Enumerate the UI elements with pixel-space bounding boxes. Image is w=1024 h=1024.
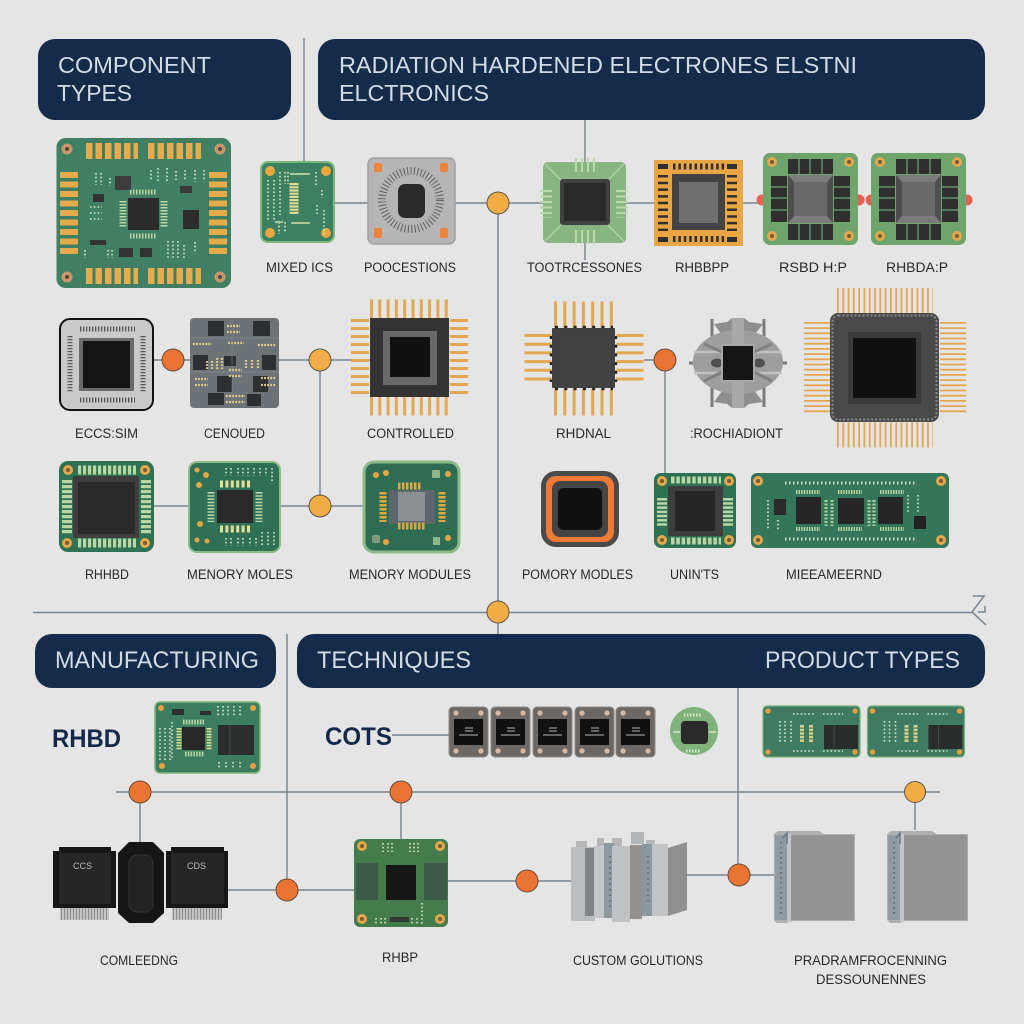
- label: rhbd ap: RHBDA:P: [886, 260, 948, 275]
- icon: ECC chip: [60, 319, 153, 410]
- icon: grey case one: [774, 831, 855, 923]
- label: measurement: MIEEAMEERND: [786, 567, 882, 582]
- connector lines: [33, 38, 986, 890]
- label: toctrcessones: TOOTRCESSONES: [527, 260, 642, 275]
- label: RHBP: RHBP: [382, 950, 418, 965]
- icon: green RSBD module: [763, 153, 858, 245]
- label: memory moles: MENORY MOLES: [187, 567, 293, 582]
- icon: grey case two: [887, 831, 968, 923]
- label: custom solutions: CUSTOM GOLUTIONS: [573, 953, 703, 968]
- icon: RHDNAL chip: [538, 315, 630, 402]
- icon: memory moles chip: [189, 462, 280, 552]
- label: ECC sim: ECCS:SIM: [75, 426, 138, 441]
- label: cenoued: CENOUED: [204, 426, 265, 441]
- icon: orange ring chip: [541, 471, 619, 547]
- icon: grey processor: [368, 158, 455, 244]
- heading: radiation hardened electronics: ELCTRONICS: [339, 80, 489, 106]
- label: RHBD: RHBD: [52, 725, 121, 753]
- heading: techniques and product types: [297, 634, 985, 688]
- heading: radiation hardened electronics: [318, 39, 985, 120]
- heading: component types: [38, 39, 291, 120]
- label: processions: POOCESTIONS: [364, 260, 456, 275]
- icon: product board two: [868, 706, 964, 757]
- node: [487, 192, 509, 214]
- node: [309, 349, 331, 371]
- node: [162, 349, 184, 371]
- heading: radiation hardened electronics: RADIATION HARDENED ELECTRONES ELSTNI: [339, 52, 857, 78]
- node: [129, 781, 151, 803]
- label: programming resources: [794, 953, 947, 987]
- heading: techniques and product types: PRODUCT TYPES: [765, 647, 960, 674]
- icon: black COTS packages: CCS: [73, 861, 92, 871]
- label: units: UNIN'TS: [670, 567, 719, 582]
- label: rsbd hop: RSBD H:P: [779, 260, 847, 275]
- icon: wide measurement board: [751, 473, 949, 548]
- node: [390, 781, 412, 803]
- heading: component types: TYPES: [57, 80, 132, 106]
- icon: custom solutions modules: [571, 832, 687, 922]
- icon: large pin-grid chip: [817, 300, 953, 435]
- icon: radial heatsink chip: [689, 318, 787, 408]
- heading: techniques and product types: TECHNIQUES: [317, 647, 471, 674]
- icon: green RHBD module: [871, 153, 966, 245]
- icon: RHBD board: [155, 702, 260, 773]
- label: rhhbd: RHHBD: [85, 567, 129, 582]
- node: [516, 870, 538, 892]
- label: COTS: COTS: [325, 723, 392, 751]
- icon: orange frame chip: [654, 160, 743, 246]
- icon: light green chip: [543, 162, 626, 243]
- icon: memory modules chip: [364, 462, 459, 552]
- icon: COTS chip row: [449, 707, 655, 757]
- icon: black COTS packages: CDS: [187, 861, 206, 871]
- label: programming resources: PRADRAMFROCENNING: [794, 953, 947, 968]
- node: [309, 495, 331, 517]
- label: pomory modles: POMORY MODLES: [522, 567, 633, 582]
- icon: RHBP green board: [354, 839, 448, 927]
- icon: product board one: [763, 706, 860, 757]
- label: controlled: CONTROLLED: [367, 426, 454, 441]
- icon: large circuit board: [56, 138, 231, 288]
- label: programming resources: DESSOUNENNES: [816, 972, 926, 987]
- node: [276, 879, 298, 901]
- heading: manufacturing: MANUFACTURING: [55, 647, 259, 674]
- label: rhdnal: RHDNAL: [556, 426, 611, 441]
- icon: grey multi-chip module: [190, 318, 279, 408]
- label: memory modules: MENORY MODULES: [349, 567, 471, 582]
- heading: component types: COMPONENT: [58, 52, 211, 78]
- label: completing: COMLEEDNG: [100, 953, 178, 968]
- node: [654, 349, 676, 371]
- icon: RHBD green chip: [59, 461, 154, 552]
- heading: manufacturing: [35, 634, 276, 688]
- node: [904, 782, 926, 802]
- icon: units board: [654, 473, 736, 548]
- node: [487, 601, 509, 623]
- icon: black COTS packages: [53, 842, 228, 923]
- icon: round chip: [670, 707, 718, 755]
- node: [728, 864, 750, 886]
- icon: mixed ICs board: [261, 162, 334, 242]
- label: rhbbpp: RHBBPP: [675, 260, 729, 275]
- label: rochiadiont: :ROCHIADIONT: [690, 426, 783, 441]
- icon: controlled orange-pin chip: [360, 309, 459, 406]
- label: mixed ICs: MIXED ICS: [266, 260, 333, 275]
- icon: red connector nubs: [756, 194, 972, 206]
